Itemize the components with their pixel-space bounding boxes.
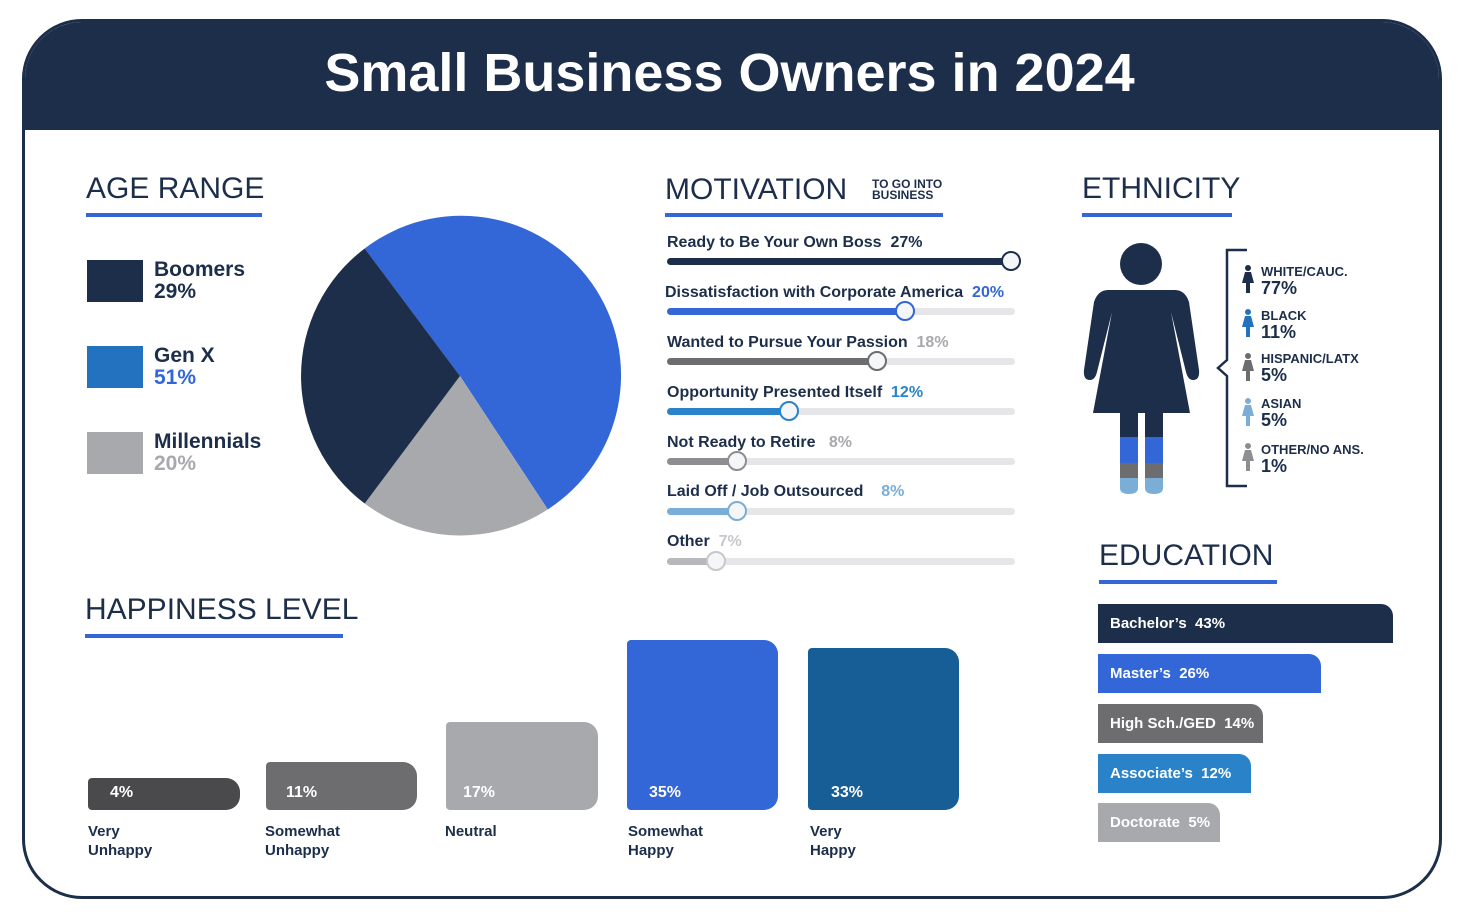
slider list: motivation: Laid Off / Job Outsourced 8% [667, 483, 904, 500]
slider list: motivation [665, 234, 1004, 550]
legend: age: Millennials [154, 430, 261, 453]
legend: ethnicity: WHITE/CAUC. [1261, 264, 1348, 279]
pie chart: age [301, 216, 622, 536]
header band [25, 22, 1439, 130]
slider list: motivation: Not Ready to Retire 8% [667, 434, 852, 451]
legend: ethnicity: 5% [1261, 410, 1287, 430]
slider list: motivation: Wanted to Pursue Your Passion 18% [667, 334, 949, 351]
legend: ethnicity: 1% [1261, 456, 1287, 476]
bar chart: education [1098, 604, 1393, 842]
bar chart: happiness: Unhappy [265, 842, 329, 859]
bar chart: happiness: Very [88, 823, 120, 840]
legend: ethnicity: BLACK [1261, 308, 1306, 323]
legend: age: Boomers [154, 258, 245, 281]
legend: ethnicity: 77% [1261, 278, 1297, 298]
bar chart: education: Bachelor’s 43% [1110, 615, 1225, 632]
bar chart: education: High Sch./GED 14% [1110, 715, 1254, 732]
text: BUSINESS [872, 188, 933, 202]
slider list: motivation: Other 7% [667, 533, 742, 550]
legend: ethnicity: 11% [1261, 322, 1296, 342]
bar chart: education: Master’s 26% [1110, 665, 1209, 682]
bar chart: happiness: Unhappy [88, 842, 152, 859]
bar chart: happiness: 17% [463, 784, 495, 801]
bar chart: happiness: 33% [831, 784, 863, 801]
bar chart: happiness: 4% [110, 784, 133, 801]
slider list: motivation: Opportunity Presented Itself 12% [667, 384, 923, 401]
bar chart: happiness: Happy [628, 842, 674, 859]
legend: age: Gen X [154, 344, 215, 367]
legend: ethnicity: OTHER/NO ANS. [1261, 442, 1364, 457]
bar chart: happiness: Somewhat [265, 823, 340, 840]
legend: ethnicity [1242, 264, 1364, 476]
bar chart: education: Associate’s 12% [1110, 765, 1231, 782]
bar chart: happiness: Neutral [445, 823, 497, 840]
legend: ethnicity: ASIAN [1261, 396, 1301, 411]
heading: ethnicity: ETHNICITY [1082, 172, 1240, 205]
bar chart: happiness: Somewhat [628, 823, 703, 840]
legend: ethnicity: HISPANIC/LATX [1261, 351, 1359, 366]
bar chart: happiness: Happy [810, 842, 856, 859]
bar chart: happiness: Very [810, 823, 842, 840]
title: Small Business Owners in 2024 [324, 43, 1135, 103]
text: TO GO INTO [872, 177, 942, 191]
legend: age: 51% [154, 366, 196, 389]
bar chart: happiness: 11% [286, 784, 317, 801]
bracket [1216, 248, 1247, 488]
heading: happiness level: HAPPINESS LEVEL [85, 593, 358, 626]
heading: education: EDUCATION [1099, 539, 1273, 572]
legend: age: 20% [154, 452, 196, 475]
bar chart: happiness: 35% [649, 784, 681, 801]
legend: ethnicity: 5% [1261, 365, 1287, 385]
icon: woman figure [1084, 243, 1200, 494]
bar chart: education: Doctorate 5% [1110, 814, 1210, 831]
heading: motivation: MOTIVATION [665, 173, 847, 206]
bar chart: happiness [88, 640, 959, 859]
slider list: motivation: Ready to Be Your Own Boss 27% [667, 234, 922, 251]
heading: age range: AGE RANGE [86, 172, 264, 205]
legend: age [87, 258, 261, 475]
slider list: motivation: Dissatisfaction with Corporate America 20% [665, 284, 1004, 301]
legend: age: 29% [154, 280, 196, 303]
